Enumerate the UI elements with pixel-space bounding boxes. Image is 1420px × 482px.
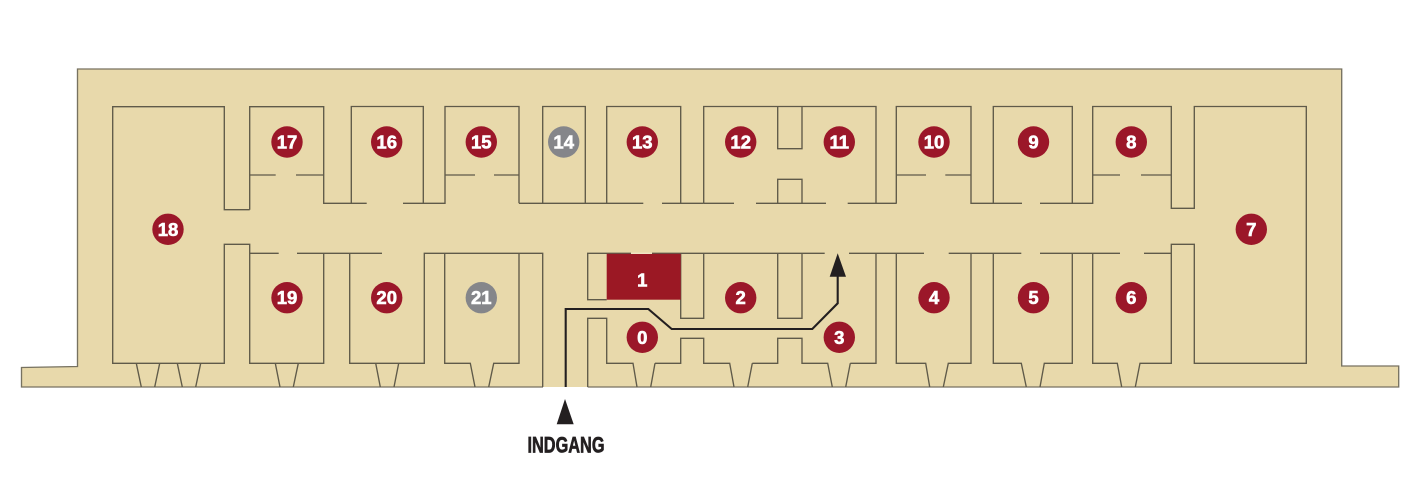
marker 4 xyxy=(918,282,950,313)
marker 0: 0 xyxy=(637,327,647,348)
marker 9 xyxy=(1018,126,1049,158)
marker 16: 16 xyxy=(376,132,397,152)
marker 12 xyxy=(725,126,756,158)
marker 10: 10 xyxy=(924,132,944,152)
left wing: room 18 and rooms 17, 19 xyxy=(113,107,382,387)
marker 14 (grey): 14 xyxy=(553,132,575,152)
marker 9: 9 xyxy=(1028,132,1039,152)
marker 10 xyxy=(918,126,950,158)
marker 8: 8 xyxy=(1126,132,1136,152)
marker 2: 2 xyxy=(736,287,746,308)
marker 18: 18 xyxy=(158,219,178,240)
marker 20 xyxy=(371,282,402,313)
marker 7 xyxy=(1236,214,1267,245)
rooms 12, 11 xyxy=(704,106,897,203)
rooms 14, 13 xyxy=(519,106,704,203)
marker 5: 5 xyxy=(1028,287,1039,308)
marker 2 xyxy=(725,282,756,313)
marker 15 xyxy=(466,126,497,158)
marker 16 xyxy=(371,126,402,158)
rooms 10, 9, 8 and room 7 xyxy=(896,106,1306,387)
entrance arrow xyxy=(557,399,574,424)
marker 17: 17 xyxy=(277,132,297,152)
route arrow xyxy=(566,253,846,387)
highlighted room 1 xyxy=(607,253,681,300)
marker 19: 19 xyxy=(277,287,297,308)
marker 6: 6 xyxy=(1126,287,1136,308)
marker 0 xyxy=(627,322,658,353)
marker 4: 4 xyxy=(929,287,940,308)
marker 17 xyxy=(271,126,303,158)
marker 19 xyxy=(271,282,303,313)
marker 20: 20 xyxy=(376,287,397,308)
marker 21 (grey): 21 xyxy=(471,287,492,308)
room walls xyxy=(113,106,1306,387)
rooms 1, 2, 0, 3 xyxy=(588,253,876,387)
building footprint xyxy=(22,69,1399,387)
marker 12: 12 xyxy=(730,132,751,152)
marker 18 xyxy=(152,214,184,245)
marker 8 xyxy=(1116,126,1147,158)
marker 3 xyxy=(824,322,855,353)
entrance label: INDGANG xyxy=(528,432,604,458)
building outline xyxy=(22,69,1399,387)
marker 13 xyxy=(627,126,658,158)
marker 7: 7 xyxy=(1246,219,1256,240)
marker 14 (grey) xyxy=(548,126,579,158)
marker 11 xyxy=(824,126,855,158)
marker 3: 3 xyxy=(834,327,844,348)
marker 11: 11 xyxy=(830,132,849,152)
rooms 16, 15, 20, 21 xyxy=(350,106,543,387)
marker 21 (grey) xyxy=(466,282,497,313)
marker 6 xyxy=(1116,282,1147,313)
rooms 4, 5, 6 xyxy=(849,253,1171,387)
highlighted room 1: 1 xyxy=(637,270,647,290)
marker 5 xyxy=(1018,282,1049,313)
marker 13: 13 xyxy=(632,132,653,152)
marker 15: 15 xyxy=(471,132,492,152)
